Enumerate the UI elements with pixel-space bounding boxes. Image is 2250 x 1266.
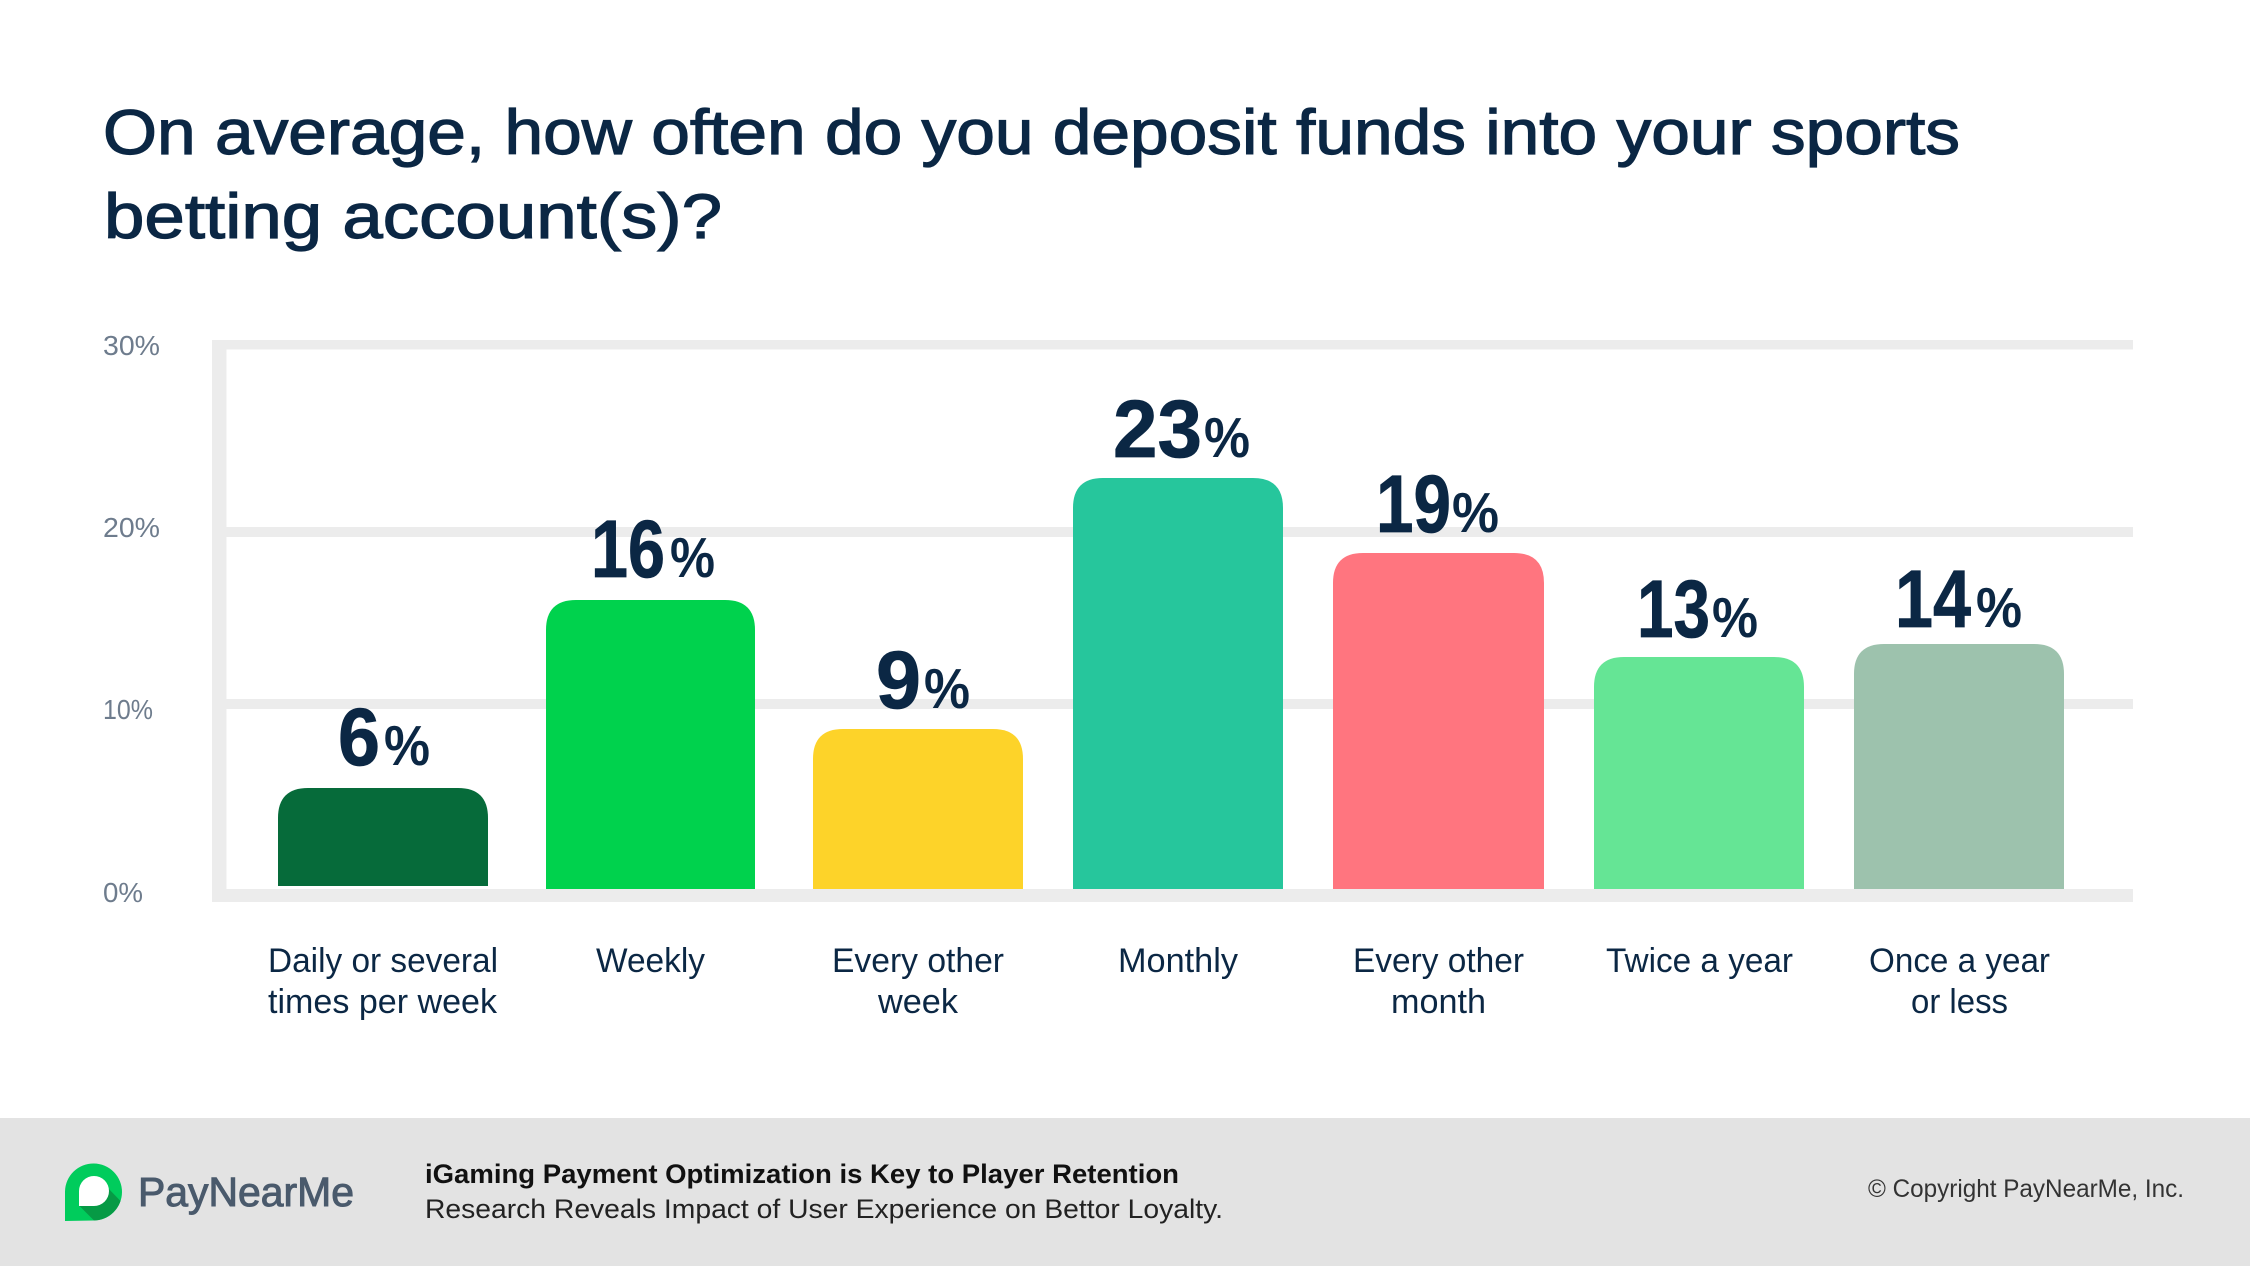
bar: weekly, 16%: 16 [591, 504, 665, 595]
bar: every other month, 19%: % [1452, 481, 1499, 545]
bar: once a year or less, 14%: Once a year [1869, 942, 2050, 980]
bar: daily or several times per week, 6%: Daily or several [268, 942, 498, 980]
bar: every other week, 9%: week [877, 983, 959, 1021]
bar: every other week, 9%: % [924, 657, 970, 721]
y axis labels: 10% [103, 694, 153, 725]
bar: once a year or less, 14% [1854, 554, 2064, 1021]
bar: every other month, 19%: Every other [1353, 942, 1524, 980]
bar: twice a year, 13%: % [1712, 586, 1758, 650]
bar: monthly, 23%: 23 [1113, 384, 1202, 475]
bar: weekly, 16%: % [670, 526, 715, 590]
icon: PayNearMe logo mark [65, 1164, 122, 1221]
logo wordmark: PayNearMe [138, 1169, 354, 1215]
footer subheading: Research Reveals Impact of User Experience on Bettor Loyalty. [425, 1194, 1223, 1224]
bar: weekly, 16% [546, 504, 755, 980]
title: betting account(s)? [104, 182, 722, 252]
bar: daily or several times per week, 6% [268, 692, 498, 1021]
copyright: © Copyright PayNearMe, Inc. [1868, 1175, 2184, 1203]
bar: once a year or less, 14%: 14 [1895, 554, 1971, 645]
bar: monthly, 23%: % [1204, 406, 1250, 470]
bar chart [103, 330, 2133, 1021]
bar: once a year or less, 14%: or less [1911, 983, 2008, 1021]
bar: once a year or less, 14%: % [1976, 576, 2022, 640]
bar: daily or several times per week, 6%: times per week [268, 983, 498, 1021]
bar: monthly, 23%: Monthly [1118, 942, 1238, 980]
title: On average, how often do you deposit funds into your sports [103, 98, 1960, 168]
y axis labels: 20% [103, 512, 160, 543]
bar: twice a year, 13% [1594, 564, 1804, 980]
bar: every other week, 9%: 9 [876, 635, 921, 726]
bar: weekly, 16%: Weekly [596, 942, 705, 980]
bar: every other week, 9%: Every other [832, 942, 1004, 980]
bar: every other month, 19%: 19 [1376, 459, 1451, 550]
bar: every other month, 19%: month [1391, 983, 1486, 1021]
title [103, 98, 1960, 252]
y axis labels: 0% [103, 877, 143, 908]
bar: daily or several times per week, 6%: 6 [338, 692, 380, 783]
bar: every other month, 19% [1333, 459, 1544, 1021]
footer heading: iGaming Payment Optimization is Key to Player Retention [425, 1159, 1179, 1189]
chart frame and gridlines [212, 340, 2133, 902]
y axis labels [103, 330, 160, 908]
y axis labels: 30% [103, 330, 160, 361]
bar: daily or several times per week, 6%: % [384, 714, 430, 778]
footer band [0, 1118, 2250, 1266]
bar: twice a year, 13%: 13 [1637, 564, 1710, 655]
bar: every other week, 9% [813, 635, 1023, 1021]
bar: twice a year, 13%: Twice a year [1606, 942, 1793, 980]
bar: monthly, 23% [1073, 384, 1283, 980]
